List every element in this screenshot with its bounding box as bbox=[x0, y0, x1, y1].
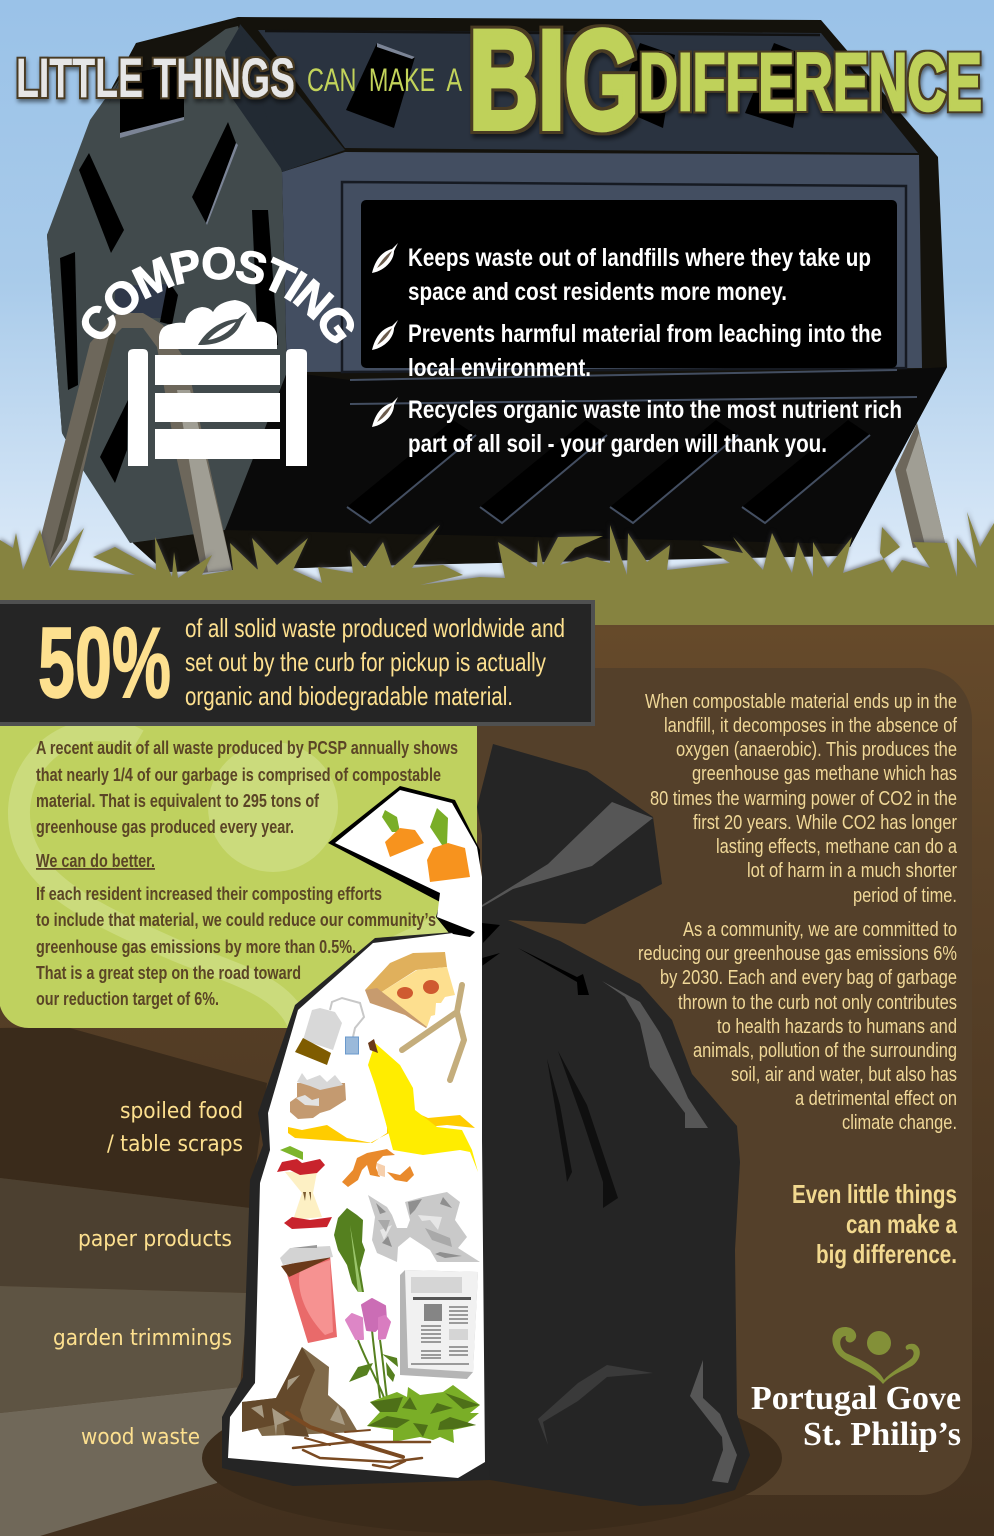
panel: composting benefits bbox=[372, 243, 902, 458]
heading: composting arc: COMPOSTING bbox=[82, 246, 354, 344]
title: CAN MAKE A bbox=[307, 62, 462, 98]
background: soil bbox=[0, 625, 994, 1536]
item: coffee cup bbox=[280, 1245, 337, 1343]
text block: closing message bbox=[792, 1179, 957, 1269]
item: newspaper bbox=[400, 1270, 478, 1379]
panel: green audit text: to include that material, we could reduce our community’s bbox=[36, 910, 436, 930]
panel: green audit text: that nearly 1/4 of our garbage is comprised of compostable bbox=[36, 765, 441, 785]
item: tea bag bbox=[295, 998, 364, 1065]
title: LITTLE THINGS bbox=[16, 46, 295, 109]
panel: composting benefits: Recycles organic waste into the most nutrient rich bbox=[408, 396, 902, 424]
logo: Portugal Cove St. Philip's bbox=[751, 1327, 961, 1453]
callout: 50% statistic: 50% bbox=[38, 607, 171, 719]
text block: methane explanation: lot of harm in a much shorter bbox=[747, 860, 957, 882]
item: kale leaf bbox=[334, 1208, 365, 1292]
panel: green audit text: our reduction target of 6%. bbox=[36, 989, 219, 1009]
item: pink flowers bbox=[346, 1299, 398, 1398]
labels: waste categories: paper products bbox=[78, 1227, 232, 1252]
text block: closing message: can make a bbox=[846, 1209, 957, 1239]
callout: 50% statistic: set out by the curb for pickup is actually bbox=[185, 647, 546, 677]
callout: 50% statistic: organic and biodegradable material. bbox=[185, 681, 513, 711]
labels: waste categories bbox=[53, 1099, 243, 1450]
panel: green audit text: If each resident increased their composting efforts bbox=[36, 884, 382, 904]
labels: waste categories: garden trimmings bbox=[53, 1326, 232, 1351]
panel: green audit text: That is a great step on the road toward bbox=[36, 963, 301, 983]
bag cut-out outline bbox=[222, 786, 490, 1486]
labels: waste categories: / table scraps bbox=[107, 1132, 243, 1157]
item: egg shell bbox=[290, 1073, 346, 1119]
composter illustration bbox=[40, 17, 947, 573]
panel: composting benefits: local environment. bbox=[408, 354, 591, 382]
item: green leaves pile bbox=[367, 1385, 480, 1443]
icon: compost crate bbox=[128, 300, 307, 466]
text block: closing message: big difference. bbox=[816, 1239, 957, 1269]
panel: green audit text: greenhouse gas produced every year. bbox=[36, 817, 294, 837]
background: sky bbox=[0, 0, 994, 625]
panel: green audit text bbox=[0, 725, 477, 1028]
item: wishbone bbox=[402, 985, 464, 1080]
panel: composting benefits: space and cost residents more money. bbox=[408, 278, 787, 306]
item: orange peel bbox=[342, 1149, 414, 1187]
panel: green audit text: material. That is equivalent to 295 tons of bbox=[36, 791, 320, 811]
panel: left fan bands bbox=[0, 1027, 267, 1536]
text block: methane explanation: period of time. bbox=[853, 885, 957, 907]
labels: waste categories: spoiled food bbox=[120, 1099, 243, 1124]
grass bbox=[0, 512, 994, 625]
item: brown paper bag bbox=[242, 1347, 358, 1437]
panel: green audit text: We can do better. bbox=[36, 851, 155, 871]
panel: green audit text: greenhouse gas emissions by more than 0.5%. bbox=[36, 937, 356, 957]
garbage bag bbox=[477, 744, 750, 1506]
logo: Portugal Cove St. Philip's: Portugal Gove bbox=[751, 1380, 961, 1417]
text block: methane explanation bbox=[645, 691, 958, 907]
text block: community commitment bbox=[638, 919, 957, 1134]
panel: composting benefits: part of all soil - your garden will thank you. bbox=[408, 430, 827, 458]
bag cut-out white interior bbox=[228, 790, 485, 1478]
item: twigs bbox=[287, 1413, 430, 1468]
item: pizza slice bbox=[365, 952, 455, 1028]
title bbox=[16, 1, 982, 158]
panel: green audit text: A recent audit of all waste produced by PCSP annually shows bbox=[36, 738, 458, 758]
callout: 50% statistic: of all solid waste produced worldwide and bbox=[185, 613, 565, 643]
panel: soil right backdrop bbox=[440, 668, 972, 1495]
title: BIG bbox=[469, 1, 639, 158]
logo: Portugal Cove St. Philip's: St. Philip’s bbox=[803, 1416, 961, 1453]
callout: 50% statistic bbox=[0, 602, 593, 724]
item: carrots bbox=[382, 808, 470, 882]
item: apple core bbox=[277, 1146, 332, 1229]
item: banana peel bbox=[288, 1039, 478, 1172]
panel: composting benefits: Prevents harmful material from leaching into the bbox=[408, 320, 882, 348]
bag shadow bbox=[202, 1382, 782, 1534]
item: crumpled paper bbox=[368, 1192, 480, 1262]
cut-out black tip bbox=[437, 917, 475, 937]
panel: composting benefits: Keeps waste out of landfills where they take up bbox=[408, 244, 871, 272]
text block: closing message: Even little things bbox=[792, 1179, 957, 1209]
text block: community commitment: a detrimental effect on bbox=[795, 1088, 957, 1110]
text block: community commitment: climate change. bbox=[842, 1112, 957, 1134]
labels: waste categories: wood waste bbox=[81, 1425, 200, 1450]
